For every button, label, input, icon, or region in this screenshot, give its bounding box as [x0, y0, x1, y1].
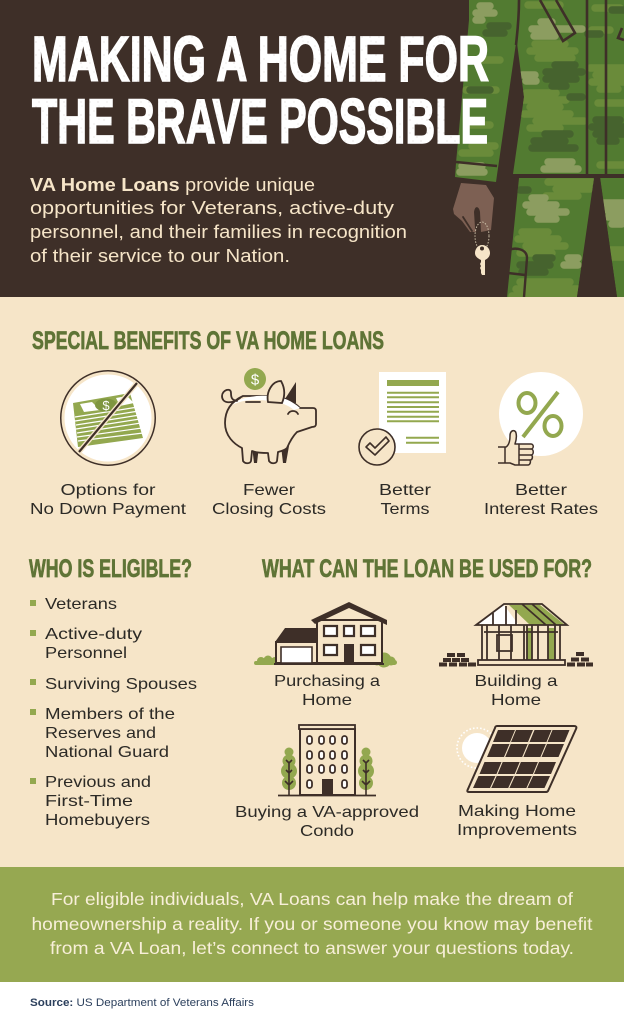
icon: piggy bank with coin: $ [251, 372, 260, 388]
icon: house [254, 602, 397, 668]
call to action text [32, 889, 593, 958]
label [484, 482, 598, 518]
icon: document with check [359, 372, 446, 465]
bullet list: Reserves and [45, 725, 156, 742]
panel: header [0, 0, 624, 297]
bullet list: National Guard [45, 744, 169, 761]
panel: call to action band [0, 867, 624, 982]
key [475, 245, 490, 275]
pocket [508, 249, 527, 297]
label [457, 803, 577, 839]
label: Home [491, 692, 541, 709]
icon: crossed out money: $ [102, 398, 110, 413]
call to action text: For eligible individuals, VA Loans can help make the dream of [51, 889, 573, 909]
use: building a home [439, 604, 593, 709]
label: Terms [380, 501, 430, 518]
intro text: of their service to our Nation. [30, 245, 290, 266]
label: Improvements [457, 822, 577, 839]
use: buying a condo [235, 725, 419, 840]
hand [453, 183, 494, 232]
label [474, 673, 558, 709]
call to action text: from a VA Loan, let’s connect to answer your questions today. [50, 938, 574, 958]
panel: who is eligible [29, 555, 197, 829]
bullet list: Homebuyers [45, 812, 150, 829]
label: Making Home [458, 803, 576, 820]
icon: piggy bank with coin [222, 368, 316, 463]
icon: crossed out money [61, 371, 155, 465]
bullet list: Active-duty [45, 626, 142, 643]
bullet list: Members of the [45, 706, 175, 723]
label [274, 673, 380, 709]
panel: what can the loan be used for [235, 555, 593, 840]
label: Interest Rates [484, 501, 598, 518]
bullet list: Personnel [45, 645, 127, 662]
label: Better [515, 482, 568, 499]
label: Building a [474, 673, 558, 690]
benefit: fewer closing costs [212, 368, 326, 518]
icon: solar panel with sun [457, 726, 576, 792]
label: Fewer [243, 482, 296, 499]
label: Better [379, 482, 432, 499]
heading: special benefits: SPECIAL BENEFITS OF VA HOME LOANS [32, 327, 384, 355]
use: home improvements [457, 726, 577, 839]
label: Home [302, 692, 352, 709]
label [235, 804, 419, 840]
dark trouser gap [577, 177, 617, 297]
label: Buying a VA-approved [235, 804, 419, 821]
label: Condo [300, 823, 354, 840]
bullet list: Surviving Spouses [45, 676, 197, 693]
icon: house frame with bricks [439, 604, 593, 666]
heading: WHO IS ELIGIBLE? [29, 555, 192, 583]
bullet list [30, 596, 197, 829]
label: No Down Payment [30, 501, 187, 518]
label [212, 482, 326, 518]
label [379, 482, 432, 518]
label [30, 482, 187, 518]
keyring [475, 222, 489, 250]
benefit: better terms [359, 372, 446, 518]
label: Options for [60, 482, 156, 499]
bullet list: Veterans [45, 596, 117, 613]
panel: main cream section [0, 297, 624, 867]
intro text [30, 174, 407, 266]
intro text: personnel, and their families in recognition [30, 221, 407, 242]
illustration: soldier in camouflage holding a key [450, 0, 624, 297]
call to action text: homeownership a reality. If you or someone you know may benefit [32, 914, 593, 934]
use: purchasing a home [254, 602, 397, 709]
intro text: opportunities for Veterans, active-duty [30, 197, 395, 218]
benefit: better interest rates [484, 372, 598, 518]
source note: Source: US Department of Veterans Affairs [30, 997, 255, 1009]
label: Closing Costs [212, 501, 326, 518]
icon: condo building with trees [278, 725, 376, 796]
intro text: VA Home Loans provide unique [30, 174, 315, 195]
bullet list: First-Time [45, 793, 133, 810]
benefit: no down payment [30, 371, 187, 518]
icon: percent with thumbs up [498, 372, 583, 465]
bullet list: Previous and [45, 774, 151, 791]
title [32, 23, 489, 157]
label: Purchasing a [274, 673, 380, 690]
